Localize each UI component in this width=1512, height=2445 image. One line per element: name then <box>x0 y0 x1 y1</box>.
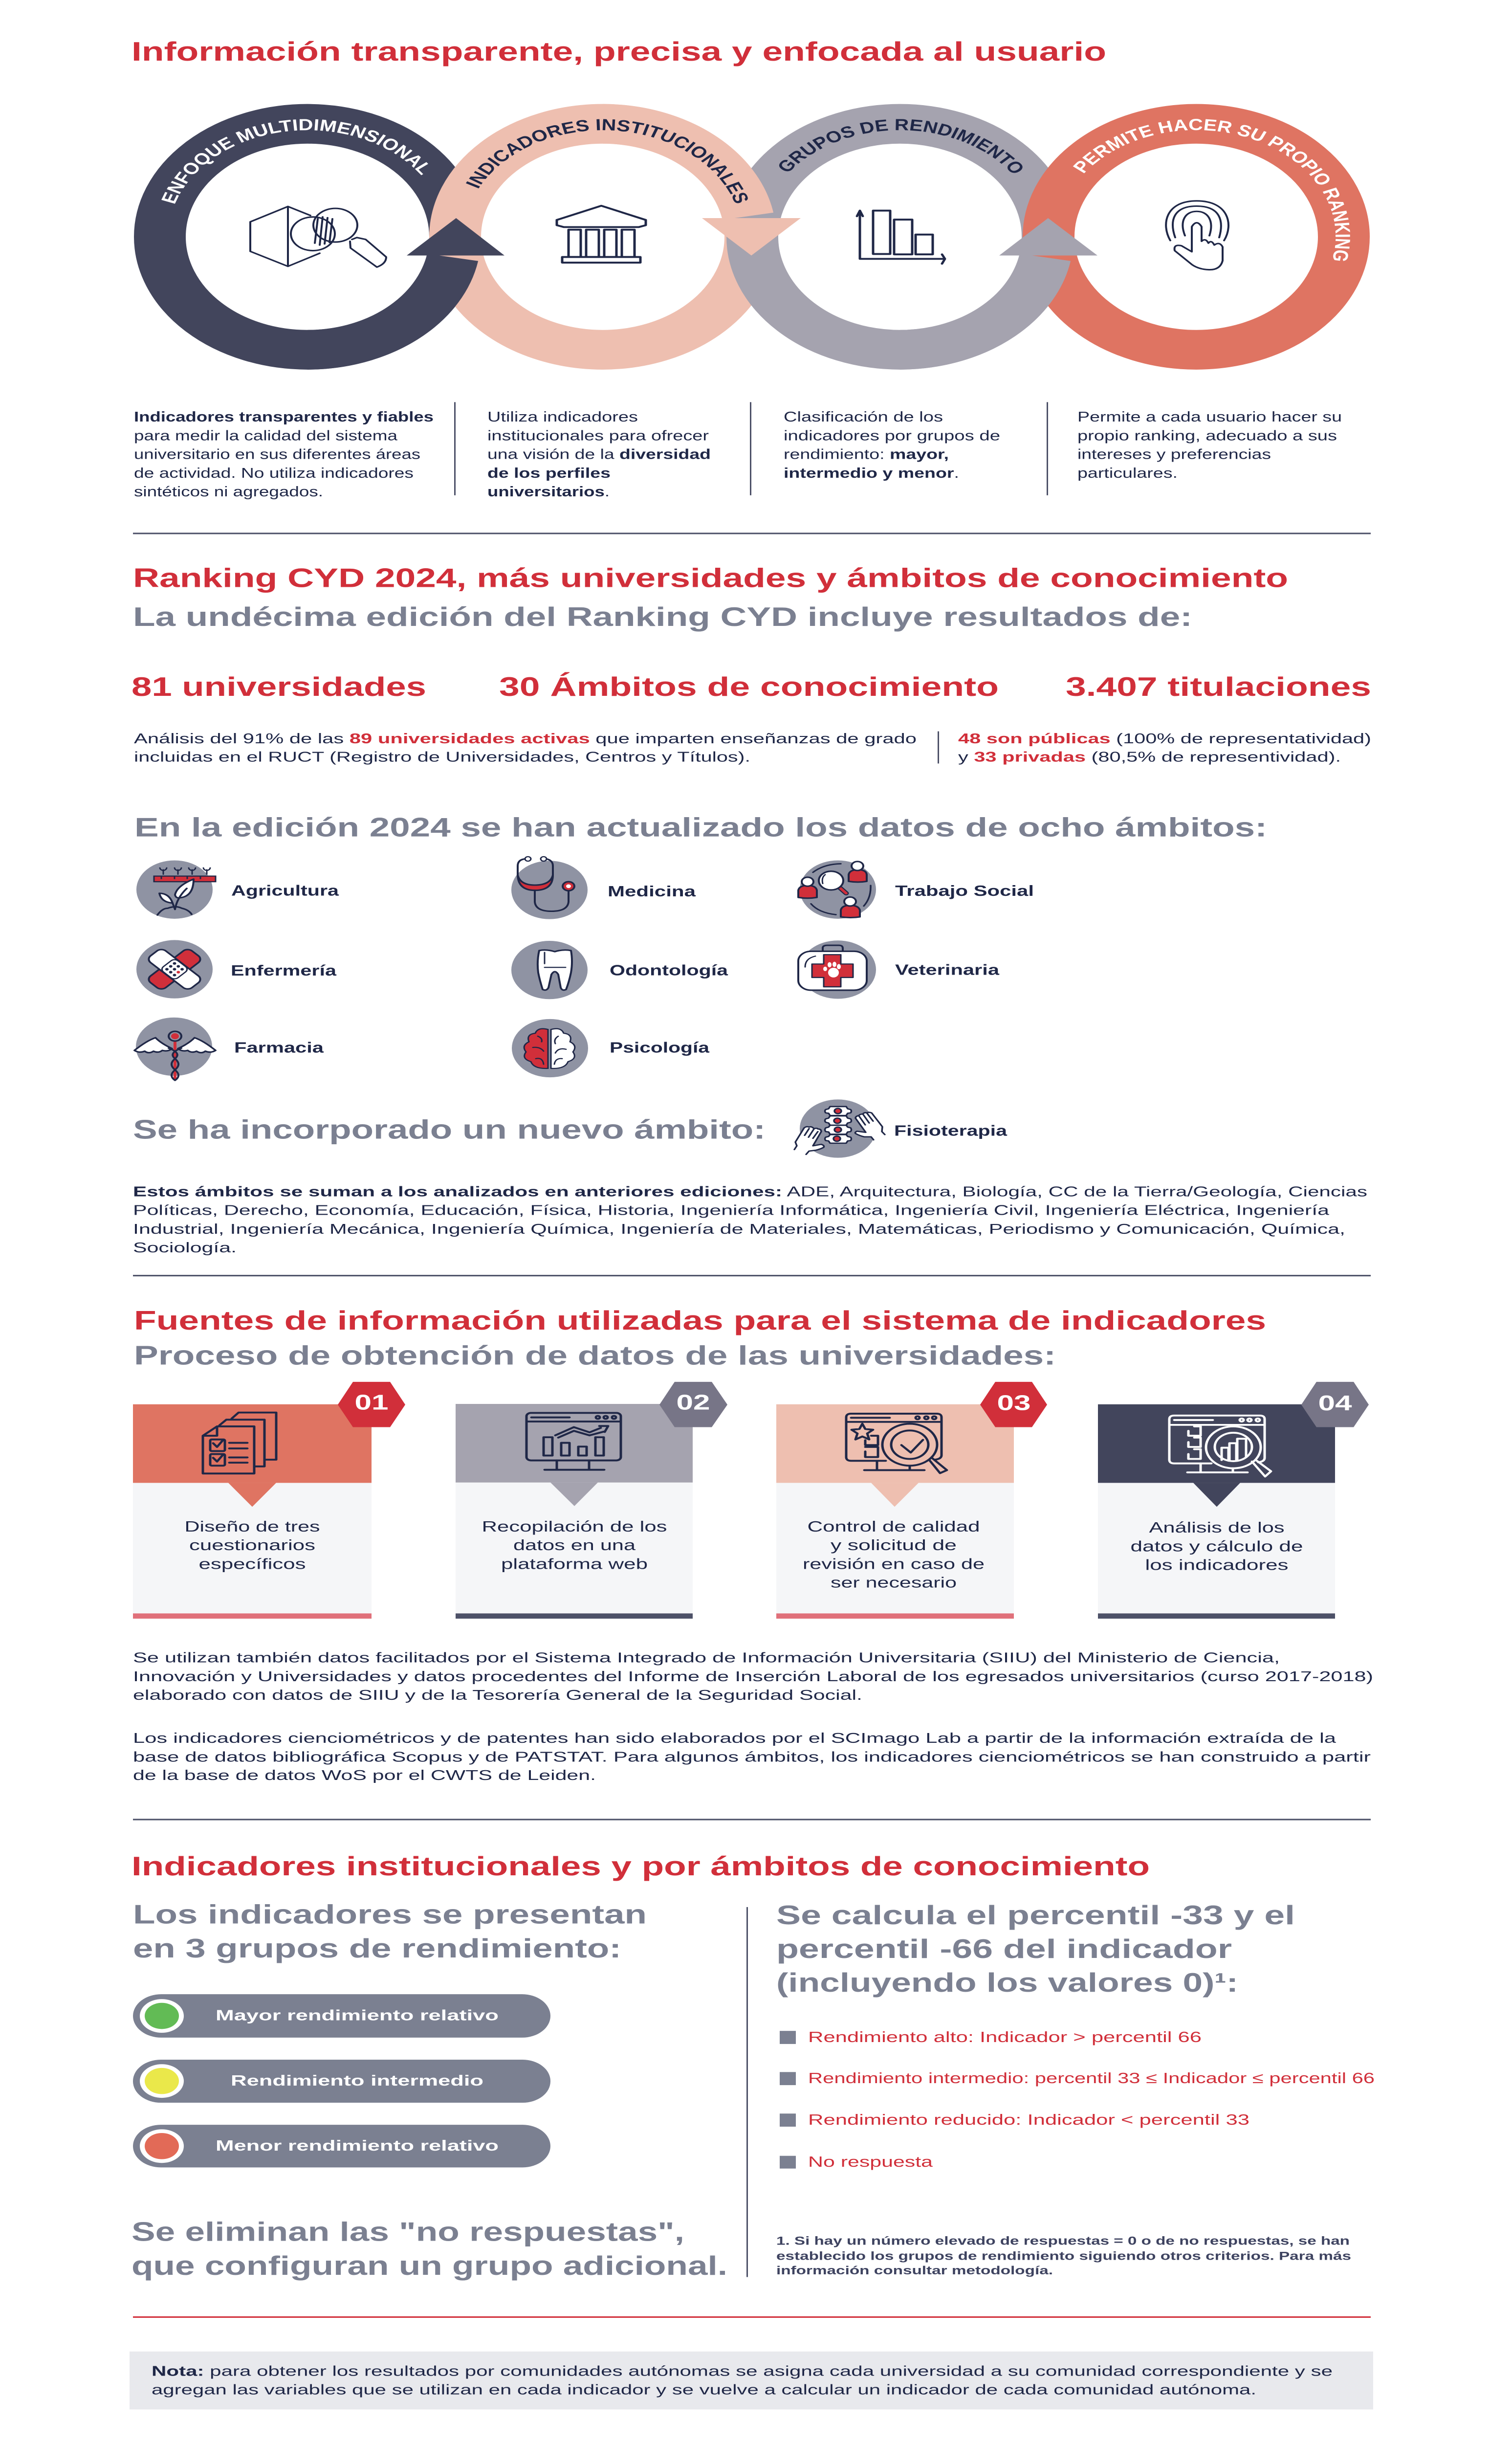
stat: universidades: 81 universidades <box>131 671 426 702</box>
text block: enfoque multidimensional: sintéticos ni agregados. <box>134 484 323 500</box>
text block: SIIU: Se utilizan también datos facilitados por el Sistema Integrado de Información Universitaria (SIIU) del Ministerio de Ciencia, <box>133 1650 1280 1666</box>
text block: ámbitos anteriores: Industrial, Ingeniería Mecánica, Ingeniería Química, Ingeniería de Materiales, Matemáticas, Periodismo y Comunicación, Química, <box>133 1221 1345 1237</box>
pill: mayor rendimiento: Mayor rendimiento relativo <box>216 2007 499 2024</box>
list: rendimiento por percentil: No respuesta <box>808 2153 933 2170</box>
subheading: proceso de obtención: Proceso de obtención de datos de las universidades: <box>134 1340 1056 1371</box>
text block: análisis: Análisis del 91% de las 89 universidades activas que imparten enseñanzas de grado <box>134 731 917 747</box>
text block: SIIU <box>133 1650 1373 1703</box>
stat: ámbitos: 30 Ámbitos de conocimiento <box>499 671 999 702</box>
icon: Enfermería <box>136 940 213 999</box>
icon: institution building <box>557 206 646 263</box>
text: paso 01 <box>184 1518 320 1572</box>
text block: enfoque multidimensional: de actividad. No utiliza indicadores <box>134 465 414 481</box>
title: Información transparente, precisa y enfocada al usuario <box>131 36 1106 67</box>
subheading: percentiles: Se calcula el percentil -33 y el <box>776 1900 1295 1930</box>
pill: rendimiento intermedio: Rendimiento intermedio <box>231 2072 483 2089</box>
icon: pointing hand <box>1166 201 1228 270</box>
text block: enfoque multidimensional: universitario en sus diferentes áreas <box>134 446 420 463</box>
panel: paso 02 <box>456 1382 727 1619</box>
text block: enfoque multidimensional: Indicadores transparentes y fiables <box>134 409 434 425</box>
text block: ámbitos anteriores <box>133 1184 1367 1256</box>
text: paso 02: Recopilación de los <box>482 1518 667 1535</box>
text: paso 03: ser necesario <box>831 1574 957 1591</box>
badge 04: 04 <box>1318 1391 1352 1415</box>
list: rendimiento por percentil <box>780 2029 1375 2170</box>
text block: indicadores cienciométricos: base de datos bibliográfica Scopus y de PATSTAT. Para algunos ámbitos, los indicadores cienciométricos se han construido a partir <box>133 1749 1371 1765</box>
label: Enfermería: Enfermería <box>231 962 337 979</box>
text block: propio ranking: intereses y preferencias <box>1077 446 1271 463</box>
text block: enfoque multidimensional <box>134 409 434 500</box>
footnote: establecido los grupos de rendimiento siguiendo otros criterios. Para más <box>776 2249 1351 2263</box>
ring label: Grupos de rendimiento: GRUPOS DE RENDIMIENTO <box>779 119 1023 173</box>
text: paso 04: Análisis de los <box>1149 1519 1285 1536</box>
text: paso 02: plataforma web <box>501 1556 648 1572</box>
text: paso 02: datos en una <box>513 1537 635 1554</box>
text block: indicadores cienciométricos: Los indicadores cienciométricos y de patentes han sido elaborados por el SCImago Lab a partir de la información extraída de la <box>133 1730 1336 1746</box>
list: rendimiento por percentil: Rendimiento alto: Indicador > percentil 66 <box>808 2029 1202 2045</box>
badge 03 <box>980 1382 1047 1427</box>
panel: paso 04 <box>1098 1382 1369 1619</box>
panel: four interlocking rings <box>137 104 1370 370</box>
text block: grupos de rendimiento: rendimiento: mayor, <box>784 446 949 463</box>
badge 04 <box>1301 1382 1369 1427</box>
text: paso 04: los indicadores <box>1145 1556 1288 1574</box>
text block: grupos de rendimiento: intermedio y menor. <box>784 465 959 481</box>
text block: indicadores institucionales: institucionales para ofrecer <box>487 428 709 444</box>
subheading: percentiles: percentil -66 del indicador <box>776 1934 1232 1964</box>
ring label: Permite hacer su propio ranking: PERMITE HACER SU PROPIO RANKING <box>1073 119 1350 261</box>
text: paso 03: Control de calidad <box>807 1518 980 1535</box>
subheading: no respuestas: que configuran un grupo adicional. <box>131 2250 727 2281</box>
text block: propio ranking: Permite a cada usuario hacer su <box>1077 409 1342 425</box>
label: Psicología: Psicología <box>610 1039 710 1056</box>
icon: bar chart <box>857 211 945 264</box>
arrow: dark ring <box>407 218 504 255</box>
pill: mayor rendimiento <box>133 1994 550 2038</box>
stat: titulaciones: 3.407 titulaciones <box>1066 671 1371 702</box>
text: paso 01: específicos <box>198 1556 306 1572</box>
text block: indicadores institucionales <box>487 409 711 500</box>
text block: públicas y privadas <box>958 731 1371 765</box>
panel: nota: Nota: para obtener los resultados por comunidades autónomas se asigna cada universidad a su comunidad correspondiente y se <box>152 2363 1333 2379</box>
badge 02 <box>659 1382 727 1427</box>
badge 01: 01 <box>355 1390 388 1414</box>
text block: indicadores cienciométricos <box>133 1730 1371 1783</box>
text: paso 03: y solicitud de <box>831 1537 957 1554</box>
text block: propio ranking: particulares. <box>1077 465 1178 481</box>
list: rendimiento por percentil: Rendimiento reducido: Indicador < percentil 33 <box>808 2112 1249 2128</box>
subheading: no respuestas <box>131 2216 727 2281</box>
text: paso 04: datos y cálculo de <box>1130 1538 1303 1555</box>
icon: Veterinaria <box>798 940 876 999</box>
subheading: percentiles: (incluyendo los valores 0)¹: <box>776 1967 1238 1998</box>
text block: ámbitos anteriores: Políticas, Derecho, Economía, Educación, Física, Historia, Ingeniería Informática, Ingeniería Civil, Ingeniería Eléctrica, Ingeniería <box>133 1202 1329 1219</box>
text block: indicadores institucionales: Utiliza indicadores <box>487 409 638 425</box>
label: Medicina: Medicina <box>608 883 696 900</box>
heading: ámbitos actualizados: En la edición 2024 se han actualizado los datos de ocho ámbitos: <box>134 812 1267 843</box>
text block: indicadores institucionales: universitarios. <box>487 484 610 500</box>
text block: indicadores institucionales: de los perfiles <box>487 465 611 481</box>
text: paso 04 <box>1130 1519 1303 1574</box>
label: Fisioterapia: Fisioterapia <box>894 1122 1008 1139</box>
footnote: información consultar metodología. <box>776 2264 1053 2277</box>
ring label: Enfoque multidimensional: ENFOQUE MULTIDIMENSIONAL <box>161 119 428 204</box>
label: Farmacia: Farmacia <box>234 1039 324 1056</box>
footnote: 1. Si hay un número elevado de respuestas = 0 o de no respuestas, se han <box>776 2234 1350 2248</box>
icon: control de calidad <box>846 1414 947 1473</box>
heading: indicadores institucionales: Indicadores institucionales y por ámbitos de conocimiento <box>131 1851 1150 1881</box>
panel: nota <box>130 2352 1373 2409</box>
icon: Medicina <box>511 857 588 919</box>
label: Trabajo Social: Trabajo Social <box>895 883 1034 899</box>
icon: cube and magnifier <box>250 206 386 267</box>
label: Veterinaria: Veterinaria <box>895 961 1000 978</box>
text block: análisis: incluidas en el RUCT (Registro de Universidades, Centros y Títulos). <box>134 749 750 765</box>
pill: rendimiento intermedio <box>133 2060 550 2103</box>
subheading: undécima edición: La undécima edición del Ranking CYD incluye resultados de: <box>133 601 1192 632</box>
badge 03: 03 <box>997 1391 1030 1415</box>
icon: cuestionarios <box>203 1413 276 1473</box>
text block: análisis <box>134 731 917 765</box>
text block: grupos de rendimiento: indicadores por grupos de <box>784 428 1000 444</box>
footnote <box>776 2234 1351 2277</box>
icon: Fisioterapia <box>794 1099 885 1158</box>
text block: grupos de rendimiento <box>784 409 1000 481</box>
subheading: grupos de rendimiento: en 3 grupos de rendimiento: <box>133 1933 621 1963</box>
panel: nota: agregan las variables que se utilizan en cada indicador y se vuelve a calcular un indicador de cada comunidad autónoma. <box>152 2382 1256 2398</box>
heading: nuevo ámbito: Se ha incorporado un nuevo ámbito: <box>133 1114 766 1145</box>
text block: públicas y privadas: 48 son públicas (100% de representatividad) <box>958 731 1371 747</box>
text block: indicadores institucionales: una visión de la diversidad <box>487 446 711 463</box>
icon: Agricultura <box>136 860 216 919</box>
text block: grupos de rendimiento: Clasificación de los <box>784 409 943 425</box>
ring label: Indicadores institucionales: INDICADORES INSTITUCIONALES <box>466 119 748 203</box>
panel: paso 03 <box>776 1382 1047 1619</box>
subheading: grupos de rendimiento <box>133 1899 647 1963</box>
subheading: percentiles <box>776 1900 1295 1998</box>
text block: propio ranking: propio ranking, adecuado a sus <box>1077 428 1337 444</box>
text: paso 03: revisión en caso de <box>803 1556 985 1572</box>
panel: paso 01 <box>133 1382 405 1619</box>
text block: públicas y privadas: y 33 privadas (80,5% de representividad). <box>958 749 1341 765</box>
arrow: pink ring <box>702 218 801 255</box>
icon: Psicología <box>512 1019 588 1077</box>
text block: propio ranking <box>1077 409 1342 481</box>
text block: enfoque multidimensional: para medir la calidad del sistema <box>134 428 397 444</box>
pill: menor rendimiento <box>133 2125 550 2167</box>
icon: Odontología <box>511 941 588 999</box>
subheading: no respuestas: Se eliminan las "no respuestas", <box>131 2216 684 2246</box>
text block: ámbitos anteriores: Sociología. <box>133 1240 237 1256</box>
text block: SIIU: elaborado con datos de SIIU y de la Tesorería General de la Seguridad Social. <box>133 1687 862 1703</box>
text: paso 02 <box>482 1518 667 1572</box>
pill: menor rendimiento: Menor rendimiento relativo <box>216 2137 499 2154</box>
icon: análisis de datos <box>1169 1416 1271 1476</box>
list: rendimiento por percentil: Rendimiento intermedio: percentil 33 ≤ Indicador ≤ percentil 66 <box>808 2070 1375 2087</box>
heading: fuentes de información: Fuentes de información utilizadas para el sistema de indicadores <box>134 1305 1266 1335</box>
text block: SIIU: Innovación y Universidades y datos procedentes del Informe de Inserción Laboral de los egresados universitarios (curso 2017-2018) <box>133 1668 1373 1685</box>
label: Odontología: Odontología <box>610 962 728 978</box>
text: paso 03 <box>803 1518 985 1591</box>
icon: Farmacia <box>134 1018 216 1080</box>
icon: plataforma web <box>526 1413 621 1470</box>
badge 02: 02 <box>676 1390 710 1414</box>
label: Agricultura: Agricultura <box>231 882 339 899</box>
text: paso 01: Diseño de tres <box>184 1518 320 1535</box>
subheading: grupos de rendimiento: Los indicadores se presentan <box>133 1899 647 1930</box>
icon: Trabajo Social <box>798 860 876 919</box>
arrow: grey ring <box>999 218 1097 255</box>
text block: indicadores cienciométricos: de la base de datos WoS por el CWTS de Leiden. <box>133 1767 596 1783</box>
badge 01 <box>338 1382 405 1427</box>
text: paso 01: cuestionarios <box>189 1537 315 1554</box>
heading: Ranking CYD 2024: Ranking CYD 2024, más universidades y ámbitos de conocimiento <box>133 562 1288 593</box>
text block: ámbitos anteriores: Estos ámbitos se suman a los analizados en anteriores ediciones: ADE, Arquitectura, Biología, CC de la Tierra/Geología, Ciencias <box>133 1184 1367 1200</box>
